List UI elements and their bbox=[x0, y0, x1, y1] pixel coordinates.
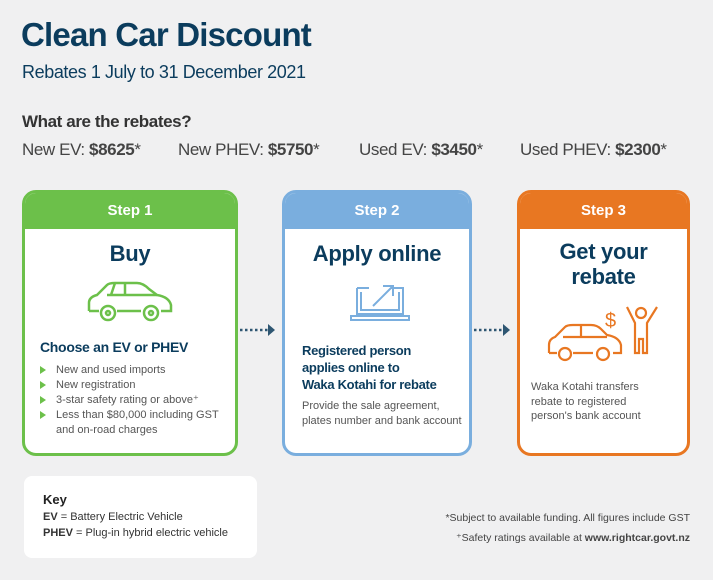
criteria list: Less than $80,000 including GST and on-road charges bbox=[56, 409, 218, 436]
rebate amounts bbox=[22, 140, 667, 159]
icon: car and person: $ bbox=[605, 310, 616, 332]
subheading registered person: Registered person bbox=[302, 343, 411, 358]
footnotes: *Subject to available funding. All figures include GST bbox=[445, 512, 690, 524]
subheading registered person bbox=[302, 343, 437, 392]
text: New PHEV: $5750* bbox=[178, 140, 319, 159]
arrow 1 bbox=[240, 324, 275, 336]
step 2 header bbox=[285, 193, 469, 229]
heading get your rebate bbox=[559, 239, 648, 289]
footnotes bbox=[445, 512, 690, 544]
heading get your rebate: rebate bbox=[571, 264, 636, 289]
arrow 2 bbox=[474, 324, 510, 336]
key box bbox=[24, 476, 257, 558]
key items: PHEV = Plug-in hybrid electric vehicle bbox=[43, 526, 228, 538]
step 3 header: Step 3 bbox=[581, 202, 626, 219]
icon: car green bbox=[88, 282, 172, 322]
text: New EV: $8625* bbox=[22, 140, 141, 159]
criteria list: 3-star safety rating or above⁺ bbox=[56, 394, 199, 406]
criteria list: New registration bbox=[56, 379, 135, 391]
step 1 header bbox=[25, 193, 235, 229]
criteria list: New and used imports bbox=[56, 364, 165, 376]
title: Clean Car Discount bbox=[21, 16, 311, 53]
subtitle: Rebates 1 July to 31 December 2021 bbox=[22, 62, 306, 82]
step 1 header: Step 1 bbox=[107, 202, 152, 219]
heading get your rebate: Get your bbox=[559, 239, 648, 264]
step 3 header bbox=[520, 193, 687, 229]
footnotes: ⁺Safety ratings available at www.rightcar.govt.nz bbox=[456, 532, 690, 544]
panel: step 2 apply bbox=[282, 190, 472, 456]
icon: laptop bbox=[350, 285, 410, 321]
panel: step 3 rebate bbox=[517, 190, 690, 456]
subheading registered person: applies online to bbox=[302, 360, 399, 375]
subheading choose: Choose an EV or PHEV bbox=[40, 339, 188, 355]
heading apply online: Apply online bbox=[313, 241, 441, 266]
criteria list bbox=[40, 364, 218, 436]
text: Used PHEV: $2300* bbox=[520, 140, 667, 159]
subheading registered person: Waka Kotahi for rebate bbox=[302, 377, 437, 392]
step 2 header: Step 2 bbox=[354, 202, 400, 219]
icon: car and person bbox=[548, 306, 658, 362]
rebates heading: What are the rebates? bbox=[22, 112, 191, 131]
heading buy: Buy bbox=[110, 241, 150, 266]
key heading: Key bbox=[43, 492, 67, 507]
text: Used EV: $3450* bbox=[359, 140, 483, 159]
apply text: Provide the sale agreement, plates number and bank account bbox=[302, 400, 462, 426]
key items bbox=[43, 511, 228, 538]
panel: step 1 buy bbox=[22, 190, 238, 456]
key items: EV = Battery Electric Vehicle bbox=[43, 511, 183, 523]
rebate text: Waka Kotahi transfers rebate to registered person's bank account bbox=[531, 381, 641, 422]
